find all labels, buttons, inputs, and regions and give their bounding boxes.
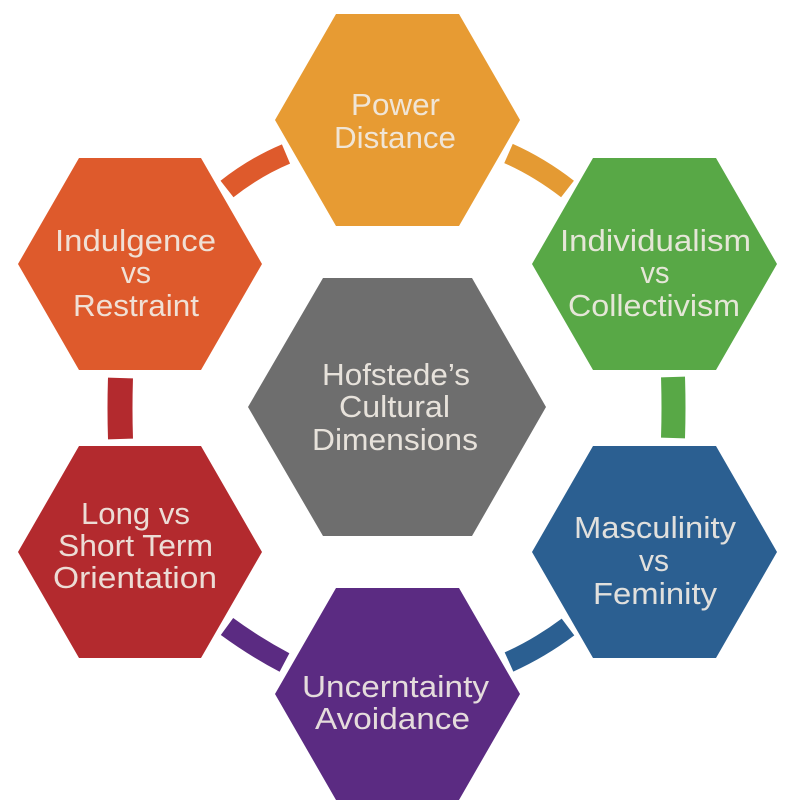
hexagon: Hofstede's Cultural Dimensions: Hofstede’s bbox=[322, 357, 470, 392]
hexagon: Uncerntainty Avoidance bbox=[275, 588, 520, 800]
hexagon: Uncerntainty Avoidance: Avoidance bbox=[315, 701, 470, 736]
hexagon: Hofstede's Cultural Dimensions: Cultural bbox=[339, 389, 450, 424]
connector: indulgence to power distance bbox=[227, 154, 286, 189]
hexagon: Masculinity vs Feminity: vs bbox=[639, 543, 669, 578]
hexagon: Long vs Short Term Orientation: Orientation bbox=[53, 560, 217, 595]
hexagon: Long vs Short Term Orientation bbox=[18, 446, 262, 658]
connector: power distance to individualism bbox=[508, 154, 568, 189]
hexagon: Individualism vs Collectivism bbox=[532, 158, 777, 370]
hexagon: Indulgence vs Restraint: Restraint bbox=[73, 288, 199, 323]
hexagon: Individualism vs Collectivism: Collectivism bbox=[568, 288, 740, 323]
hexagon: Masculinity vs Feminity: Feminity bbox=[593, 576, 718, 611]
hexagon: Power Distance: Power bbox=[351, 87, 440, 122]
hexagon: Indulgence vs Restraint: vs bbox=[121, 255, 151, 290]
hexagon: Indulgence vs Restraint: Indulgence bbox=[55, 223, 216, 258]
hexagon: Hofstede's Cultural Dimensions: Dimensions bbox=[312, 422, 478, 457]
hexagon: Indulgence vs Restraint bbox=[18, 158, 262, 370]
connector: individualism to masculinity bbox=[661, 377, 686, 438]
hexagon: Power Distance: Distance bbox=[334, 120, 456, 155]
connector: uncertainty avoidance to long vs short term bbox=[227, 626, 284, 662]
hexagon: Power Distance bbox=[275, 14, 520, 226]
hexagon: Masculinity vs Feminity: Masculinity bbox=[574, 510, 737, 545]
connector: masculinity to uncertainty avoidance bbox=[509, 627, 568, 662]
hexagon: Hofstede's Cultural Dimensions bbox=[248, 278, 546, 536]
hexagon: Individualism vs Collectivism: Individualism bbox=[560, 223, 751, 258]
hexagon: Long vs Short Term Orientation: Long vs bbox=[81, 496, 190, 531]
hexagon: Masculinity vs Feminity bbox=[532, 446, 777, 658]
hexagon: Long vs Short Term Orientation: Short Term bbox=[58, 528, 213, 563]
hexagon: Uncerntainty Avoidance: Uncerntainty bbox=[302, 669, 490, 704]
hexagon: Individualism vs Collectivism: vs bbox=[640, 255, 670, 290]
connector: long vs short term to indulgence bbox=[108, 378, 133, 439]
